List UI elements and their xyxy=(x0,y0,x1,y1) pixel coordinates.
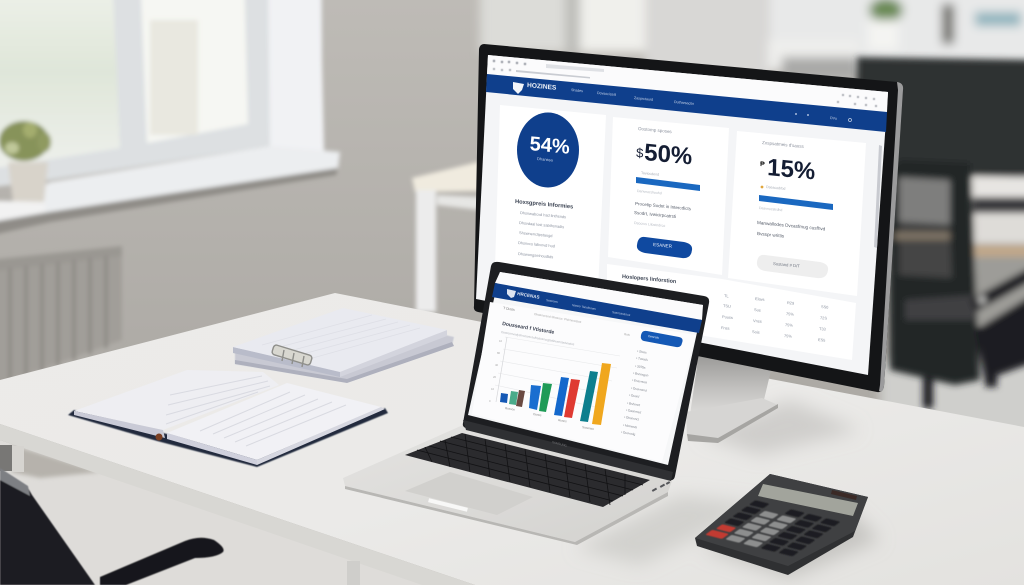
desk shadows xyxy=(575,400,880,578)
bar chart: Dsnss xyxy=(533,412,542,417)
laptop side list: • Dssvnsnd xyxy=(631,386,647,393)
keyboard xyxy=(405,433,650,507)
card: 15%: Dseacodrbd xyxy=(766,185,785,191)
navy header bar: DVu xyxy=(830,116,837,121)
laptop navy header: HRCENAS xyxy=(517,291,540,300)
table panel: 72S xyxy=(820,315,827,321)
card: $50%: Procetip Sodnt in Intercdicts xyxy=(635,201,692,211)
window sill xyxy=(0,146,340,226)
laptop content panel xyxy=(472,302,696,462)
laptop navy header: Seasons xyxy=(546,298,559,304)
back window and shelf xyxy=(480,0,1024,100)
binder rings xyxy=(271,344,313,367)
logo xyxy=(513,82,524,94)
navy header bar: HOZINES xyxy=(527,82,557,92)
card: $50%: Taviocdend xyxy=(641,171,659,177)
table panel: Fnss xyxy=(721,325,730,331)
table panel: SS0 xyxy=(821,304,829,310)
laptop base xyxy=(343,425,673,542)
bar chart: 0 xyxy=(489,399,491,403)
laptop side list: • 3075s xyxy=(635,364,646,370)
table panel xyxy=(607,264,856,360)
navy header bar: Dutharsactin xyxy=(674,100,694,106)
table panel: Vnss xyxy=(753,318,762,324)
binder stack xyxy=(233,308,454,383)
laptop: SAMSUNG xyxy=(552,440,568,448)
laptop browser chrome xyxy=(495,272,703,320)
laptop side list: • Bshsnct xyxy=(627,401,641,407)
laptop lid xyxy=(463,262,709,480)
navy header bar xyxy=(486,74,887,132)
card: 15%: ₱ xyxy=(760,161,765,168)
browser chrome xyxy=(487,55,888,112)
laptop navy header xyxy=(492,283,702,333)
laptop side list: • Dusvodg xyxy=(621,430,636,436)
navy header bar: Shsdes xyxy=(571,88,583,93)
laptop side list xyxy=(621,349,649,436)
bar chart: 20 xyxy=(493,375,497,379)
potted plant xyxy=(0,121,51,224)
office chair xyxy=(0,468,224,585)
floor under desk xyxy=(0,440,430,585)
calculator keys xyxy=(705,500,840,557)
card: 54%: Dhswongsmhoudtds xyxy=(518,251,553,259)
pill button xyxy=(757,255,828,278)
card: $50%: $ xyxy=(636,145,644,161)
table panel: 75% xyxy=(785,322,793,328)
back chair xyxy=(888,160,1024,408)
laptop content panel: Bsts xyxy=(624,332,631,337)
laptop side list: • Moswsts xyxy=(623,423,638,429)
radiator xyxy=(0,246,122,395)
table panel: Hoslopers linforstion xyxy=(622,274,676,285)
card: $50%: 50% xyxy=(644,139,693,171)
card: 15%: Zospsatmeis d'sauss xyxy=(762,140,805,149)
desktop monitor xyxy=(474,44,903,392)
navy header bar: Dovsocissal xyxy=(597,91,616,97)
window frame xyxy=(0,0,324,190)
laptop content panel: T Dusts xyxy=(503,306,515,312)
card: $50%: Danvnocdrouhd xyxy=(637,189,662,195)
table panel: Sois xyxy=(752,329,760,335)
table panel: T33 xyxy=(819,326,826,332)
bar chart: 10 xyxy=(491,387,495,391)
table panel: R29 xyxy=(787,300,794,306)
laptop content panel: Dsoscsnvndyshrcosntvsclhsdosncrgtsdlouenstsdvisdos xyxy=(501,330,575,346)
table panel: Elavs xyxy=(755,296,765,302)
table panel: Sus xyxy=(754,307,761,313)
navy header bar: Zasprctaurd xyxy=(634,96,653,102)
trackpad xyxy=(405,472,533,515)
button xyxy=(637,237,692,258)
pill button: Sostand # D/T xyxy=(773,261,800,269)
card: 15%: Bvsspr writtis xyxy=(757,231,785,239)
laptop screen xyxy=(468,272,703,465)
laptop button xyxy=(641,331,683,347)
card: 15%: Dasvnocstrdhd xyxy=(759,206,782,212)
binding xyxy=(156,434,162,440)
laptop side list: • Dhsnsnct xyxy=(624,415,639,422)
calculator display xyxy=(758,484,858,516)
table panel: Puuss xyxy=(722,314,733,320)
laptop button: Descats xyxy=(648,334,660,340)
card: 54%: Dhsnwabcvd hsd linthsnds xyxy=(520,210,566,219)
table panel: ES5 xyxy=(818,337,825,343)
bar chart: 40 xyxy=(495,363,499,367)
laptop side list: • Stsss xyxy=(637,349,647,355)
laptop content panel: Dousseard f Vtistorde xyxy=(502,321,555,336)
card: 54%: Shswnenclipstaugd xyxy=(519,230,553,238)
bar chart: 10 xyxy=(499,339,503,343)
laptop side list: • Essvnsss xyxy=(632,378,648,385)
table panel: 75% xyxy=(784,333,792,339)
bar chart xyxy=(489,337,620,431)
table panel: 75% xyxy=(786,311,794,317)
bar chart: Ssoersto xyxy=(582,425,595,431)
back table right xyxy=(973,177,1024,325)
back monitor xyxy=(857,57,1024,178)
card: $50%: Oostomp sposes xyxy=(638,126,673,134)
card: 54%: 54% xyxy=(529,133,570,159)
calculator xyxy=(695,474,868,575)
monitor bezel xyxy=(474,44,903,392)
laptop navy header: Sasncastrous xyxy=(612,310,631,317)
table panel: TL xyxy=(724,293,729,299)
laptop side list: • Tussds xyxy=(636,356,649,362)
open notebook xyxy=(68,370,388,467)
circle stat xyxy=(517,112,579,188)
bar chart: 80 xyxy=(497,351,501,355)
card: $50%: Ssodrt, ivwicirpcatrsti xyxy=(634,210,676,219)
card: 54%: Dhsvdaal lost sabthsnadis xyxy=(519,220,564,229)
monitor screen xyxy=(476,55,888,375)
card: $50%: Dsocrcs Lilostndrco xyxy=(634,221,665,228)
laptop ports xyxy=(652,481,670,492)
bar chart: Bsssos xyxy=(505,406,516,412)
laptop side list: • Bsnssgsn xyxy=(633,371,649,378)
scrollbar xyxy=(874,145,882,248)
monitor stand xyxy=(686,345,778,443)
back table xyxy=(412,161,482,312)
card: $50% xyxy=(608,117,729,275)
card: 15%: 15% xyxy=(767,154,816,186)
card: 54% xyxy=(495,105,606,290)
table panel: TSU xyxy=(723,303,731,309)
card: 15% xyxy=(728,131,866,296)
laptop navy header: Nasso Tonsfomes xyxy=(572,303,597,311)
button: ESANER xyxy=(653,242,673,249)
card: 54%: Dhanssa xyxy=(537,156,554,163)
laptop content panel: Dhasnvcsnd Shosrco: Phicnorestos xyxy=(534,312,582,324)
card: 54%: Hoxsgpreis Informies xyxy=(515,199,573,211)
card: 54%: Dhsnvcs labvnvd hud xyxy=(518,240,555,249)
desk xyxy=(0,293,1024,585)
bar chart: Rusns xyxy=(558,418,567,424)
laptop side list: • Dusrd xyxy=(629,393,640,399)
laptop side list: • Dasnmsd xyxy=(626,408,642,415)
laptop xyxy=(343,262,709,545)
card: 15%: Manwallodes Dvcasfmug cusfhvd xyxy=(757,220,826,232)
